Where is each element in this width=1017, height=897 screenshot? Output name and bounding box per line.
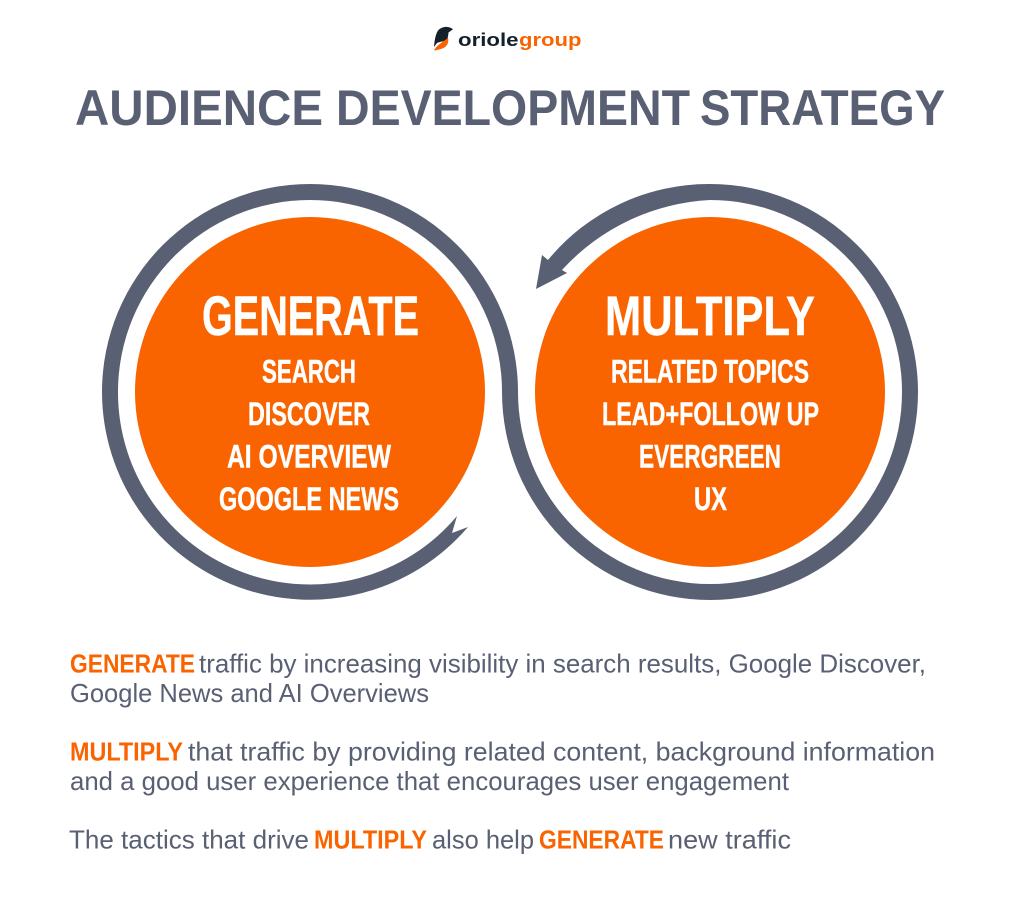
- multiply list: [602, 354, 819, 517]
- multiply list: UX: [694, 481, 727, 517]
- heading: generate: GENERATE: [202, 284, 419, 347]
- multiply list: RELATED TOPICS: [611, 354, 809, 390]
- text block: multiply description: and a good user experience that encourages user engagement: [70, 766, 790, 796]
- generate list: AI OVERVIEW: [227, 438, 392, 474]
- panel: generate circle: [135, 217, 485, 567]
- generate list: DISCOVER: [248, 396, 370, 432]
- icon: oriole bird: [434, 27, 453, 50]
- logo: [434, 27, 582, 50]
- text block: multiply description: [70, 736, 935, 796]
- multiply list: LEAD+FOLLOW UP: [602, 396, 819, 432]
- text block: generate description: [70, 648, 926, 708]
- title: AUDIENCE: [75, 80, 323, 136]
- heading: multiply: MULTIPLY: [605, 284, 815, 347]
- text block: generate description: traffic by increasing visibility in search results, Google Discover,: [199, 648, 926, 678]
- text block: closing statement: MULTIPLY: [314, 824, 427, 854]
- panel: multiply circle: [535, 217, 885, 567]
- generate list: [219, 354, 399, 517]
- text block: generate description: GENERATE: [70, 648, 195, 678]
- text block: multiply description: MULTIPLY: [70, 736, 183, 766]
- text block: closing statement: [69, 824, 791, 854]
- text block: generate description: Google News and AI Overviews: [70, 678, 429, 708]
- title: [75, 80, 945, 136]
- text block: multiply description: that traffic by providing related content, background information: [188, 736, 935, 766]
- generate list: GOOGLE NEWS: [219, 481, 399, 517]
- arrow: figure-eight loop connecting both circles: [102, 184, 918, 600]
- title: DEVELOPMENT: [336, 80, 690, 136]
- text block: closing statement: GENERATE: [539, 824, 664, 854]
- text block: closing statement: The tactics that drive: [69, 824, 309, 854]
- multiply list: EVERGREEN: [639, 438, 781, 474]
- generate list: SEARCH: [262, 354, 356, 390]
- title: STRATEGY: [700, 80, 945, 136]
- logo wordmark: oriole: oriole: [458, 30, 518, 50]
- text block: closing statement: also help: [432, 824, 534, 854]
- text block: closing statement: new traffic: [668, 824, 791, 854]
- logo wordmark: group: group: [519, 30, 582, 50]
